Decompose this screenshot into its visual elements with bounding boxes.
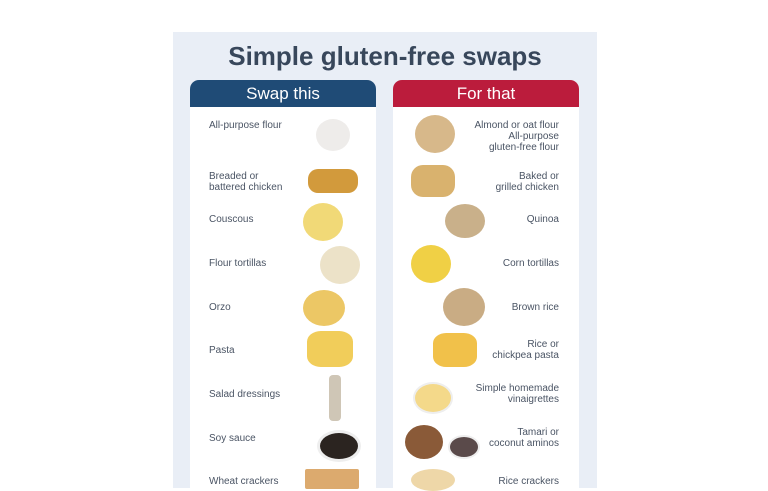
left item texts: Wheat crackers [209, 476, 278, 487]
left item texts: Breaded or [209, 171, 258, 182]
right item texts: vinaigrettes [508, 394, 559, 405]
right item texts: Tamari or [517, 427, 559, 438]
header: for that [393, 80, 579, 107]
right item texts: chickpea pasta [492, 350, 559, 361]
left item texts: Orzo [209, 302, 231, 313]
left item texts: battered chicken [209, 182, 282, 193]
header: swap this [190, 80, 376, 107]
left item texts: Salad dressings [209, 389, 280, 400]
left item texts: Pasta [209, 345, 235, 356]
right item texts: Simple homemade [476, 383, 559, 394]
right item texts: coconut aminos [489, 438, 559, 449]
right item texts: Baked or [519, 171, 559, 182]
title: Simple gluten-free swaps [228, 41, 542, 71]
column: for that [393, 107, 579, 488]
right item texts: Almond or oat flour [474, 120, 559, 131]
header: for that: For that [457, 84, 515, 103]
right item texts: gluten-free flour [489, 142, 559, 153]
right item texts: Quinoa [527, 214, 559, 225]
left item texts: Soy sauce [209, 433, 256, 444]
left item texts [209, 119, 361, 489]
column: swap this [190, 107, 376, 488]
right item texts: Rice or [527, 339, 559, 350]
panel: main [173, 32, 597, 488]
right item texts: All-purpose [508, 131, 559, 142]
right item texts [405, 115, 559, 491]
right item texts: Brown rice [512, 302, 559, 313]
header: swap this: Swap this [246, 84, 320, 103]
right item texts: Corn tortillas [503, 258, 559, 269]
left item texts: Flour tortillas [209, 258, 266, 269]
left item texts: Couscous [209, 214, 253, 225]
right item texts: grilled chicken [496, 182, 559, 193]
left item texts: All-purpose flour [209, 120, 282, 131]
right item texts: Rice crackers [498, 476, 559, 487]
